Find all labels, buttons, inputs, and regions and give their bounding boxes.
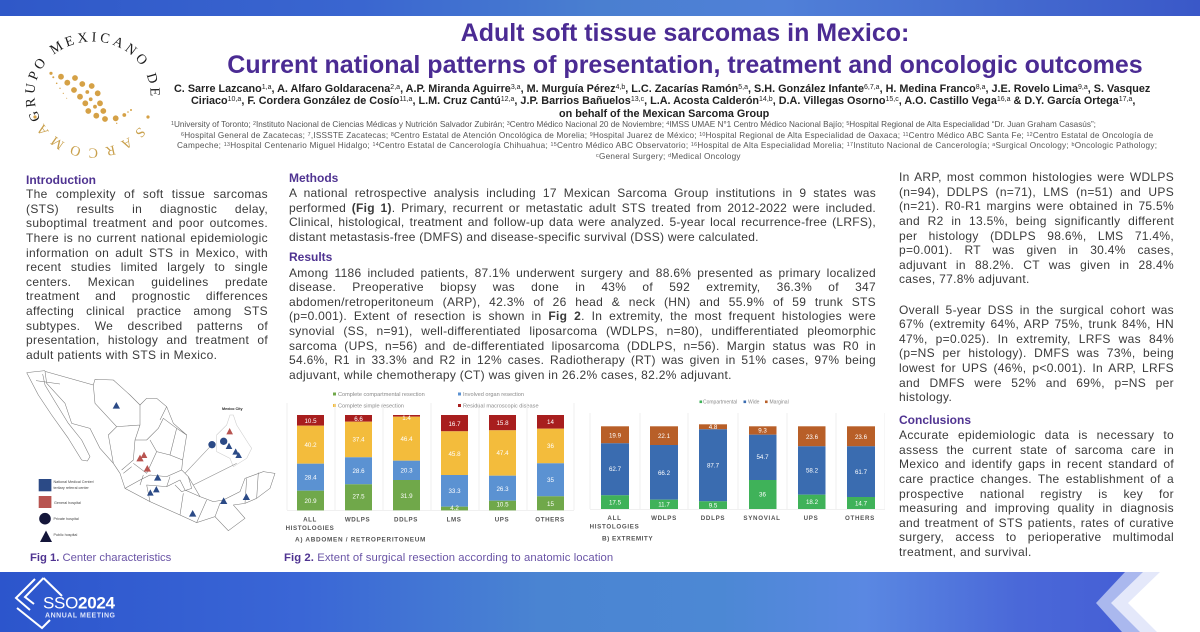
logo: Grupo Mexicano de Sarcomas: GRUPO MEXICANO DE	[25, 32, 160, 122]
text: methods	[289, 186, 876, 244]
text: survival results: histology.	[899, 390, 952, 404]
text: methods: distant metastasis-free (DMFS) and disease-specific survival (DSS) were calculated.	[289, 230, 759, 244]
caption: figure 1: Fig 1. Center characteristics	[30, 552, 171, 564]
text: conclusions: Mexico and identify gaps in recent standard of	[899, 457, 1174, 471]
text: introduction: information on adult STS in Mexico, with	[26, 246, 268, 260]
logo: SSO 2024 annual meeting: SSO2024	[43, 594, 116, 612]
chart A values: 10.5	[496, 502, 509, 508]
text: conclusions: measuring and improving quality in diagnosis	[899, 501, 1174, 515]
text: results: Among 1186 included patients, 87.1% underwent surgery and 88.6% presented as primary localized	[289, 266, 876, 280]
chart B axis labels	[590, 515, 875, 542]
chart B values: 36	[759, 492, 766, 498]
chart A axis labels: OTHERS	[535, 516, 565, 524]
text: survival results	[899, 302, 1174, 404]
text: survival results: 67% (extremity 64%, ARP 75%, trunk 84%, HN	[899, 317, 1174, 331]
chart B axis labels: HISTOLOGIES	[590, 524, 639, 530]
text: survival results: (p=NS per histology). DMFS was 73%, being	[899, 346, 1174, 360]
chart B values	[609, 424, 868, 510]
text: results: synovial (SS, n=91), well-differentiated liposarcoma (WDLPS, n=80), undifferentiated pleomorphic	[289, 324, 876, 338]
text: introduction: presentation, histology and treatment of	[26, 333, 268, 347]
text: results: (p=0.001). Extent of resection is shown in Fig 2. In extremity, the most frequent histologies were	[289, 309, 876, 323]
heading: Introduction: Introduction	[26, 173, 96, 187]
chart A values: 14	[547, 419, 554, 426]
chart A values: 36	[547, 443, 554, 450]
text: ARP results: per histology (DDLPS 98.6%, LMS 71.4%,	[899, 228, 1174, 242]
chart A values: 26.3	[496, 486, 509, 493]
chart A values: 27.5	[352, 494, 365, 500]
chart B values: 4.8	[709, 424, 718, 431]
authors	[174, 82, 1150, 120]
text: methods: performed (Fig 1). Primary, recurrent or metastatic adult STS treated from 2012-2022 were included.	[289, 201, 876, 215]
text: conclusions: surgery, access to perioperative multimodal	[899, 530, 1174, 544]
text: survival results: lowest for UPS (46%, p<0.001). In ARP, LRFS	[899, 361, 1174, 375]
chart B values: 22.1	[658, 433, 671, 440]
map: center locations in Mexico	[26, 370, 276, 542]
chart A values: 6.6	[354, 416, 363, 423]
chart A legend: Complete compartmental resection	[338, 392, 425, 398]
text: introduction: (STS) results in diagnostic delay,	[26, 202, 268, 216]
caption: figure 2: Fig 2. Extent of surgical resection according to anatomic location	[284, 552, 613, 564]
chart B values: 23.6	[855, 434, 868, 441]
text: ARP results: In ARP, most common histologies were WDLPS	[899, 170, 1174, 184]
chart A values: 4.2	[450, 505, 459, 512]
heading: Results: Results	[289, 250, 332, 264]
text: results: 54.6%, R1 in 33.3% and R2 in 12% cases. Radiotherapy (RT) was given in 51% cases, 97% being	[289, 353, 876, 367]
chart B: extremity stacked bars	[590, 400, 885, 542]
chart A legend: Complete simple resection	[338, 404, 404, 410]
text: results: disease. Preoperative biopsy was done in 43% of 592 extremity, 36.3% of 347	[289, 280, 876, 294]
chart B legend: Marginal	[770, 400, 789, 406]
affiliations: Campeche; 13Hospital Centenario Miguel Hidalgo; 14Centro Estatal de Cancerología Chihuahua; 15Centro Médico ABC Observatorio; 16Hospital de Alta Especialidad Morelia; 17Instituto Nacional de Cancerología; aSurgical Oncology; bOncologic Pathology;	[177, 141, 1157, 150]
chart B values: 19.9	[609, 432, 622, 440]
chart A axis labels: A) ABDOMEN / RETROPERITONEUM	[295, 536, 426, 544]
title	[227, 19, 1143, 79]
chart B legend	[700, 400, 789, 406]
chart B values: 61.7	[855, 469, 868, 476]
map legend: Private hospital	[54, 517, 79, 521]
text: ARP results: (n=21). R0-R1 margins were obtained in 75.5%	[899, 199, 1174, 213]
chart B axis labels: UPS	[804, 515, 818, 522]
text: introduction: adult patients with STS in Mexico.	[26, 348, 217, 362]
text: ARP results: cases, 77.8% adjuvant.	[899, 272, 1030, 286]
chart A axis labels: ALL	[303, 516, 317, 524]
chart B values: 17.5	[609, 500, 622, 506]
chart A axis labels: WDLPS	[345, 516, 370, 524]
chart B values: 66.2	[658, 470, 671, 477]
chart A axis labels: DDLPS	[394, 516, 418, 524]
chart B legend: Wide	[748, 400, 760, 406]
text: conclusions: and treatment of STS patients, rates of curative	[899, 516, 1174, 530]
text: introduction	[26, 187, 268, 362]
chart A values: 1.4	[402, 415, 411, 422]
chart A values: 16.7	[448, 421, 461, 428]
chart B values: 14.7	[855, 500, 868, 508]
affiliations: cGeneral Surgery; dMedical Oncology	[596, 152, 741, 161]
text: methods: A national retrospective analysis including 17 Mexican Sarcoma Group institutions in 9 states was	[289, 186, 876, 200]
text: conclusions: Accurate epidemiologic data is necessary to	[899, 428, 1174, 442]
chart A legend: Residual macroscopic disease	[463, 404, 539, 410]
map legend: Mexico City	[222, 407, 243, 411]
affiliations	[171, 120, 1157, 161]
text: introduction: centers. Mexican guidelines predate	[26, 275, 268, 289]
title: Current national patterns of presentation, treatment and oncologic outcomes	[227, 51, 1143, 79]
authors: on behalf of the Mexican Sarcoma Group	[559, 108, 769, 120]
authors: Ciriaco10,a, F. Cordera González de Cosío11,a, L.M. Cruz Cantú12,a, J.P. Barrios Bañuelos13,c, L.A. Acosta Calderón14,b, D.A. Villegas Osorno15,c, A.O. Castillo Vega16,a & D.Y. García Ortega17,a,	[191, 95, 1135, 107]
chart A values: 20.3	[400, 468, 413, 474]
affiliations: 6Hospital General de Zacatecas; 7,ISSSTE Zacatecas; 8Centro Estatal de Atención Oncológica de Morelia; 9Hospital Juarez de México; 10Hospital Regional de Alta Especialidad de Oaxaca; 11Centro Médico ABC Santa Fe; 12Centro Estatal de Oncología de	[181, 131, 1153, 140]
logo: SSO 2024 annual meeting: ANNUAL MEETING	[45, 612, 116, 620]
chart B bars	[601, 424, 875, 509]
banner chevron cut-out	[1096, 572, 1200, 632]
bottom banner	[0, 572, 1200, 632]
text: introduction: The complexity of soft tissue sarcomas	[26, 187, 268, 201]
text: results: abdomen/retroperitoneum (ARP), 42.3% of 26 head & neck (HN) and 55.9% of 59 trunk STS	[289, 295, 876, 309]
text: ARP results	[899, 170, 1174, 286]
text: survival results: Overall 5-year DSS in the surgical cohort was	[899, 302, 1174, 316]
chart A values: 35	[547, 477, 554, 484]
chart A values	[304, 415, 554, 512]
title: Adult soft tissue sarcomas in Mexico:	[461, 19, 909, 47]
chart A values: 15	[547, 501, 554, 508]
map legend: National Medical Center/	[54, 480, 95, 484]
chart B values: 62.7	[609, 466, 622, 473]
text: introduction: affecting clinical practice among STS	[26, 304, 268, 318]
chart A axis labels: UPS	[495, 516, 509, 524]
text: conclusions: treatment, and survival.	[899, 545, 1032, 559]
chart B values: 54.7	[756, 454, 769, 461]
chart A values: 31.9	[400, 493, 413, 500]
chart A values: 20.9	[304, 498, 317, 505]
chart B values: 23.6	[806, 434, 819, 441]
top banner	[0, 0, 1200, 16]
text: introduction: There is no current national epidemiologic	[26, 231, 268, 245]
text: ARP results: p=0.001). RT was given in 30.4% cases,	[899, 243, 1174, 257]
chart A values: 28.4	[304, 474, 317, 482]
chart A values: 45.8	[448, 451, 461, 458]
chart B values: 9.3	[758, 428, 767, 434]
chart A: abdomen / retroperitoneum stacked bars	[286, 392, 574, 544]
text: ARP results: and R2 in 13.5%, being significantly different	[899, 214, 1174, 228]
text: ARP results: adjuvant in 88.2%. CT was given in 28.4%	[899, 258, 1174, 272]
affiliations: 1University of Toronto; 2Instituto Nacional de Ciencias Médicas y Nutrición Salvador Zubirán; 3Centro Médico Nacional 20 de Noviembre; 4IMSS UMAE N°1 Centro Médico Nacional Bajío; 5Hospital Regional de Alta Especialidad “Dr. Juan Graham Casasús”;	[171, 120, 1096, 129]
chart A bars	[297, 415, 564, 510]
chart A values: 28.6	[352, 468, 365, 475]
chart B legend: Compartmental	[703, 400, 737, 406]
authors: C. Sarre Lazcano1,a, A. Alfaro Goldaracena2,a, A.P. Miranda Aguirre3,a, M. Murguía Pérez4,b, L.C. Zacarías Ramón5,a, S.H. González Infante6,7,a, H. Medina Franco8,a, J.E. Rovelo Lima9,a, S. Vasquez	[174, 82, 1150, 94]
chart A values: 37.4	[352, 436, 365, 444]
chart B values: 9.5	[709, 502, 718, 510]
chart A axis labels: LMS	[447, 516, 461, 524]
map legend: tertiary referral center	[54, 486, 90, 490]
chart A legend: Involved organ resection	[463, 392, 524, 398]
chart B values: 11.7	[658, 502, 670, 508]
text: results: adjuvant, while chemotherapy (CT) was given in 26.2% cases, 82.2% adjuvant.	[289, 368, 732, 382]
text: results: sarcoma (UPS, n=56) and de-differentiated liposarcoma (DDLPS, n=56). Margin status was R0 in	[289, 339, 876, 353]
text: introduction: suboptimal treatment and poor outcomes.	[26, 216, 268, 230]
text: conclusions: care practice changes. The establishment of a	[899, 472, 1174, 486]
chart B axis labels: B) EXTREMITY	[602, 536, 653, 542]
chart B values: 58.2	[806, 468, 819, 474]
text: survival results: 47%, p=0.025). In extremity, LRFS was 84%	[899, 332, 1174, 346]
text: results	[289, 266, 876, 382]
chart B values: 87.7	[707, 462, 720, 470]
text: introduction: recent studies limited largely to single	[26, 260, 268, 274]
chart A values: 46.4	[400, 436, 413, 443]
chart B values: 18.2	[806, 499, 819, 506]
heading: Conclusions: Conclusions	[899, 413, 971, 427]
text: survival results: and DMFS were 52% and 69%, p=NS per	[899, 376, 1174, 390]
chart B axis labels: DDLPS	[701, 515, 725, 522]
text: introduction: treatment and prognostic differences	[26, 289, 268, 303]
map legend: Public hospital	[54, 533, 77, 537]
map legend: General hospital	[54, 501, 81, 505]
heading: Methods: Methods	[289, 171, 338, 185]
text: methods: Clinical, histological, treatment and follow-up data were analyzed. 5-year local recurrence-free (LRFS),	[289, 215, 876, 229]
chart A axis labels	[286, 516, 565, 544]
chart A legend	[333, 392, 539, 410]
chart A values: 33.3	[448, 488, 461, 495]
map legend	[39, 407, 243, 542]
chart A axis labels: HISTOLOGIES	[286, 525, 334, 532]
text: conclusions	[899, 428, 1174, 559]
chart B axis labels: OTHERS	[845, 515, 875, 522]
chart A values: 15.8	[496, 420, 509, 427]
text: introduction: subtypes. We described patterns of	[26, 319, 268, 333]
text: conclusions: assess the current state of sarcoma care in	[899, 443, 1174, 457]
chart A values: 40.2	[304, 442, 317, 449]
chart B axis labels: ALL	[607, 515, 622, 522]
text: ARP results: (n=94), DDLPS (n=71), LMS (n=51) and UPS	[899, 185, 1174, 199]
chart A values: 10.5	[304, 418, 317, 425]
chart B axis labels: SYNOVIAL	[743, 515, 781, 522]
text: conclusions: prospective national registry is key for	[899, 486, 1174, 500]
chart A values: 47.4	[496, 450, 509, 457]
chart B axis labels: WDLPS	[651, 515, 677, 522]
map markers	[113, 402, 250, 517]
logo: SSO 2024 annual meeting	[14, 577, 116, 630]
